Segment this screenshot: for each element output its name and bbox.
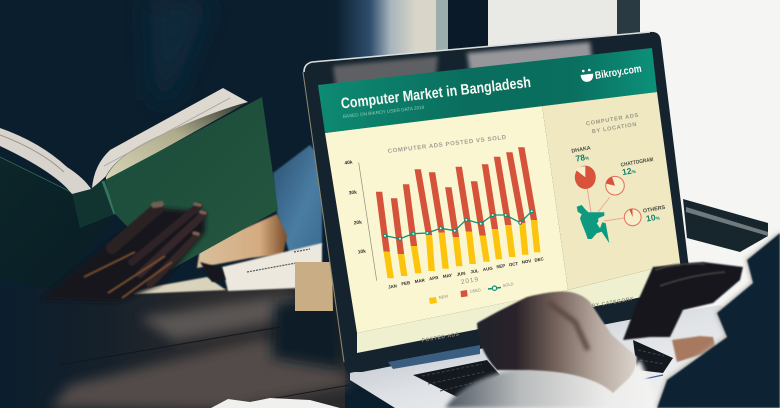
bottom strip bbox=[357, 262, 683, 353]
month labels: MAY bbox=[442, 273, 453, 279]
bottom section headings: POSTED ADS bbox=[421, 331, 460, 344]
shirt sleeve behind book bbox=[273, 145, 322, 255]
Bangladesh map bbox=[577, 205, 609, 243]
month labels: DEC bbox=[534, 256, 545, 263]
right cover bbox=[105, 97, 278, 270]
wooden table bbox=[0, 288, 350, 408]
y axis: 40k bbox=[344, 159, 353, 167]
left pages bbox=[0, 128, 91, 194]
left chart panel bbox=[325, 105, 568, 333]
subtitle: BASED ON BIKROY USER DATA 2019 bbox=[343, 105, 425, 119]
legend: USED bbox=[469, 287, 481, 294]
Chattogram label: 12% bbox=[621, 165, 636, 177]
sold line bbox=[384, 210, 533, 240]
left cover bbox=[0, 158, 115, 290]
legend: SOLD bbox=[502, 281, 514, 288]
bottom section headings bbox=[421, 296, 634, 344]
Dhaka pie bbox=[575, 166, 596, 189]
spine bbox=[72, 181, 115, 228]
y axis: 20k bbox=[353, 219, 363, 227]
left hand on keyboard with sleeve bbox=[445, 292, 660, 408]
paper at bottom of table bbox=[211, 398, 340, 408]
month labels: MAR bbox=[414, 277, 426, 284]
location panel bbox=[571, 113, 666, 243]
month labels: JAN bbox=[388, 283, 397, 290]
laptop bbox=[303, 32, 745, 408]
month labels: SEP bbox=[496, 263, 506, 269]
right inner page bbox=[106, 102, 248, 181]
month labels bbox=[388, 256, 545, 290]
Dhaka label bbox=[571, 145, 591, 164]
right hand on keyboard bbox=[623, 262, 743, 340]
open notebook on table bbox=[133, 243, 333, 311]
y axis: 30k bbox=[348, 189, 358, 197]
month labels: FEB bbox=[401, 280, 411, 286]
Chattogram pie bbox=[606, 176, 624, 195]
fingers on keys under right hand bbox=[672, 336, 716, 362]
infographic screen bbox=[318, 48, 683, 353]
month labels: APR bbox=[429, 275, 440, 281]
month labels: JUL bbox=[470, 268, 479, 274]
Dhaka label: DHAKA bbox=[571, 145, 591, 155]
Others label: 10% bbox=[645, 211, 660, 224]
keyboard bbox=[413, 340, 673, 397]
hinge strip bbox=[388, 345, 480, 369]
logo: Bikroy.com bbox=[594, 63, 642, 82]
Others pie bbox=[624, 209, 641, 226]
month labels: JUN bbox=[456, 271, 466, 277]
Others label bbox=[643, 205, 666, 224]
chart heading: COMPUTER ADS POSTED VS SOLD bbox=[388, 135, 507, 155]
Chattogram label: CHATTOGRAM bbox=[620, 157, 654, 169]
hand holding book bbox=[40, 204, 205, 302]
header band bbox=[318, 48, 657, 133]
month labels: OCT bbox=[508, 261, 519, 267]
year label: 2019 bbox=[460, 276, 480, 286]
Dhaka label: 78% bbox=[575, 151, 590, 164]
title: Computer Market in Bangladesh bbox=[340, 74, 532, 112]
window frame at right bbox=[683, 199, 768, 252]
Chattogram label bbox=[620, 157, 654, 177]
bezel reflections bbox=[333, 42, 592, 88]
Others label: OTHERS bbox=[643, 205, 666, 215]
right pages bbox=[92, 88, 248, 188]
month labels: AUG bbox=[483, 265, 494, 272]
used bars bbox=[376, 147, 537, 254]
right map panel bbox=[542, 92, 680, 290]
bar chart: computer ads posted vs sold bbox=[344, 135, 545, 304]
new bars bbox=[384, 220, 540, 278]
location heading: COMPUTER ADS bbox=[586, 113, 639, 127]
logo bbox=[581, 63, 642, 82]
y axis: 10k bbox=[357, 248, 367, 256]
legend bbox=[429, 281, 514, 304]
person's shoulder in foreground bbox=[657, 233, 780, 408]
month labels: NOV bbox=[521, 258, 532, 265]
open green book bbox=[0, 88, 278, 290]
legend: NEW bbox=[438, 293, 449, 300]
location heading bbox=[586, 113, 639, 135]
forearm behind book bbox=[197, 214, 287, 268]
connector lines bbox=[587, 189, 624, 221]
laptop lid bezel bbox=[303, 32, 692, 372]
location heading: BY LOCATION bbox=[591, 122, 638, 135]
bottom section headings: ADS BY CATEGORY bbox=[577, 296, 634, 312]
laptop base bbox=[350, 305, 745, 408]
y axis bbox=[344, 159, 377, 281]
